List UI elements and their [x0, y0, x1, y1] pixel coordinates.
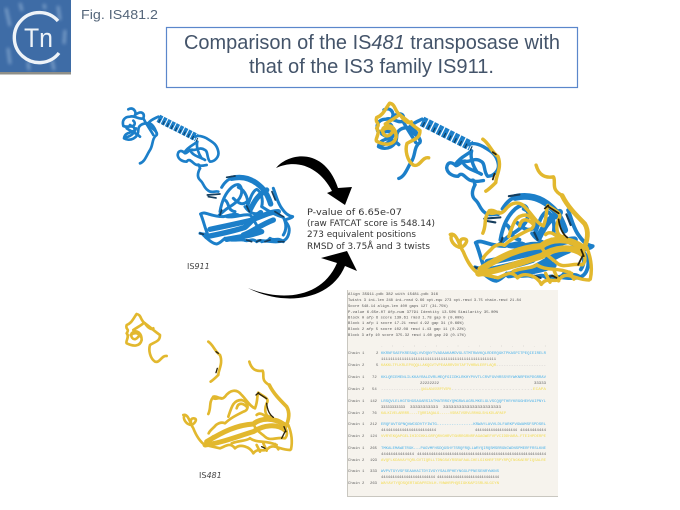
alignment sequences chain 2: -------------------- [496, 364, 546, 368]
alignment match lines: 33333 [534, 382, 547, 386]
alignment row labels: 212 [370, 423, 378, 427]
logo: CTn: Tn [24, 23, 53, 53]
statistics text block: (raw FATCAT score is 548.14) [307, 219, 435, 229]
alignment match lines: 3333333333333333333333 [443, 406, 502, 410]
alignment sequences chain 2: ---------------- [381, 388, 421, 392]
alignment row labels: Chain 2 [348, 458, 365, 463]
alignment match lines: 444444444444444444444444 [381, 429, 437, 433]
protein: IS481 gold ribbon [126, 314, 292, 453]
alignment sequences chain 1: TMKALEMAWETRGK---PAGVMFHSDQGSHYTSRQFRQLLWRYQIRQSMSRRGNCWDNSPMERFFRSLKNE [381, 447, 547, 451]
alignment sequences chain 2: ECAPA [533, 388, 547, 392]
title box: that of the IS3 family IS911. [249, 56, 494, 78]
alignment sequences chain 2: QAGLADASSRPTVSPH [421, 388, 452, 392]
alignment sequences chain 2 [381, 364, 547, 486]
alignment sequences chain 1: WVPVTGYVSFSEAAHAITDYIVGYYSALRPHEYNGGLPPNESENRYWKNS [381, 470, 500, 474]
alignment sequences chain 1: ERQFAVTGPNQVWCGDVTYIWTG---------------KRWAYLAVVLDLFARKPVGWAMSFSPDSRL [381, 423, 547, 427]
logo: CTn [0, 0, 71, 74]
alignment match lines: 44444444444444444444444444444444444444444444444444444444 [417, 453, 547, 457]
alignment row labels: 76 [372, 412, 377, 416]
arrow: bottom curved arrow [248, 251, 357, 298]
title box: Comparison of the IS481 transposase with [184, 32, 560, 54]
alignment match lines [381, 345, 547, 480]
alignment sequences chain 2: WAYAVTYQDSQERTADAPRINLH-YNWHRPHQSIGKKAPISRLNLGCYN [381, 482, 500, 486]
alignment sequences chain 1: KKLQRIEMENLILKKAYRALDVRLMEQFGIIDKLRKHYPVVTLCRVFGVHRSSYRYWKNRPEKPDGRRAV [381, 376, 547, 380]
alignment match lines: 4444444444444444444444444444 [437, 476, 500, 480]
alignment sequences chain 1: LRSQVLELHGTSHGSAGARSIATMATRRGYQMGRWLAGRLMKELGLVSCQQPTHRYKRGGHEHVAIPNYL [381, 400, 547, 404]
alignment row labels: Chain 2 [348, 387, 365, 392]
panel: FATCAT alignment output [347, 290, 558, 496]
alignment sequences chain 1 [381, 352, 547, 474]
alignment header text: Block 2 afp 5 score 102.08 rmsd 1.43 gap 11 (0.22%) [348, 327, 466, 332]
alignment row labels: Chain 1 [348, 446, 365, 451]
alignment header text: Block 3 afp 10 score 375.32 rmsd 1.60 gap 29 (0.17%) [348, 333, 466, 338]
alignment sequences chain 2: KAKKLTFLKRLEPVQQLLAKQGVTVPEAARRVDVTAFTVHRWLERFLAQR [381, 364, 497, 368]
alignment row labels: Chain 1 [348, 422, 365, 427]
arrow: top curved arrow [276, 156, 352, 205]
alignment match lines: 444444444444444444444444 [381, 476, 436, 480]
alignment row labels: Chain 1 [348, 351, 365, 356]
alignment row labels: 72 [372, 376, 377, 380]
protein: IS911 blue ribbon [123, 109, 293, 244]
alignment header text: Block 1 afp 1 score 17.21 rmsd 4.92 gap 31 (0.66%) [348, 321, 464, 326]
alignment row labels: 263 [370, 482, 378, 486]
alignment match lines: 22222222 [420, 382, 440, 386]
protein overlay: IS911 and IS481 superposed [376, 103, 593, 284]
statistics text block: RMSD of 3.75Å and 3 twists [307, 240, 431, 252]
alignment row labels: Chain 1 [348, 399, 365, 404]
alignment row labels: Chain 2 [348, 481, 365, 486]
alignment header text [348, 292, 522, 338]
figure label: Fig. IS481.2 [81, 7, 158, 22]
alignment row labels: Chain 2 [348, 363, 365, 368]
alignment match lines: 4444444444444444444 [475, 429, 518, 433]
alignment header text: Score 548.14 align-len 400 gaps 127 (31.75%) [348, 304, 448, 309]
alignment sequences chain 2: KALKIVELARRRR----TQRRIAQALG-----VSRATVSRVLRRHGLSHLKDLAPAEP [381, 412, 507, 416]
alignment match lines: . : . : . : . : . : . : . : . : [381, 345, 546, 348]
alignment row labels: 54 [372, 388, 377, 392]
statistics text block: 273 equivalent positions [307, 230, 417, 240]
alignment sequences chain 1: KKRNFSAEFKRESAQLVVDQNYTVADAAKAMDVGLSTMTRWVKQLRDERQGKTPKASPITPEQIEIRELR [381, 352, 547, 356]
alignment row labels: 5 [376, 364, 379, 368]
statistics text block [307, 208, 435, 252]
alignment sequences chain 2: --------------------------- [451, 388, 533, 392]
alignment row labels [348, 351, 379, 486]
statistics text block: P-value of 6.65e-07 [307, 208, 402, 218]
label: IS481: IS481 [199, 471, 222, 480]
alignment row labels: Chain 1 [348, 375, 365, 380]
alignment header text: Block 0 afp 6 score 139.61 rmsd 1.78 gap 0 (0.00%) [348, 316, 464, 320]
alignment match lines: 33333333333 [410, 406, 439, 410]
alignment sequences chain 2: VVRYEKQAPGELIHIDIKKLGRFQRVGHRVTGNRRGRNRFAGAGWEFVFVCIDDHARA-FTEIHPDERPE [381, 435, 547, 439]
alignment sequences chain 2: AVQFLKDAVAYYQRLGVTIQRLLTDNGSAYRSRAFAALCHELGIKHRFTRPYRPQTNGKAERFIQSALRE [381, 459, 547, 463]
alignment row labels: 142 [370, 400, 378, 404]
title box [166, 28, 578, 88]
alignment row labels: Chain 2 [348, 411, 365, 416]
alignment row labels: 124 [370, 435, 378, 439]
alignment header text: Twists 3 ini-len 248 ini-rmsd 9.66 opt-equ 273 opt-rmsd 3.75 chain-rmsd 21.84 [348, 298, 522, 303]
alignment row labels: 193 [370, 459, 378, 463]
alignment match lines: 44444444444 [520, 429, 547, 433]
alignment row labels: 333 [370, 470, 378, 474]
label: IS911: IS911 [187, 262, 210, 271]
alignment row labels: 265 [370, 447, 378, 451]
alignment match lines: 33333333333 [381, 406, 406, 410]
alignment header text: P-value 6.65e-07 Afp-num 37791 Identity 13.50% Similarity 35.00% [348, 310, 499, 315]
alignment row labels: Chain 1 [348, 469, 365, 474]
alignment match lines: 44444444444444 [381, 453, 415, 457]
alignment row labels: Chain 2 [348, 434, 365, 439]
alignment header text: Align 35911.pdb 382 with 15481.pdb 316 [348, 292, 439, 297]
alignment match lines: 11111111111111111111111111111111111111111111111111 [381, 358, 497, 362]
alignment row labels: 2 [376, 352, 379, 356]
